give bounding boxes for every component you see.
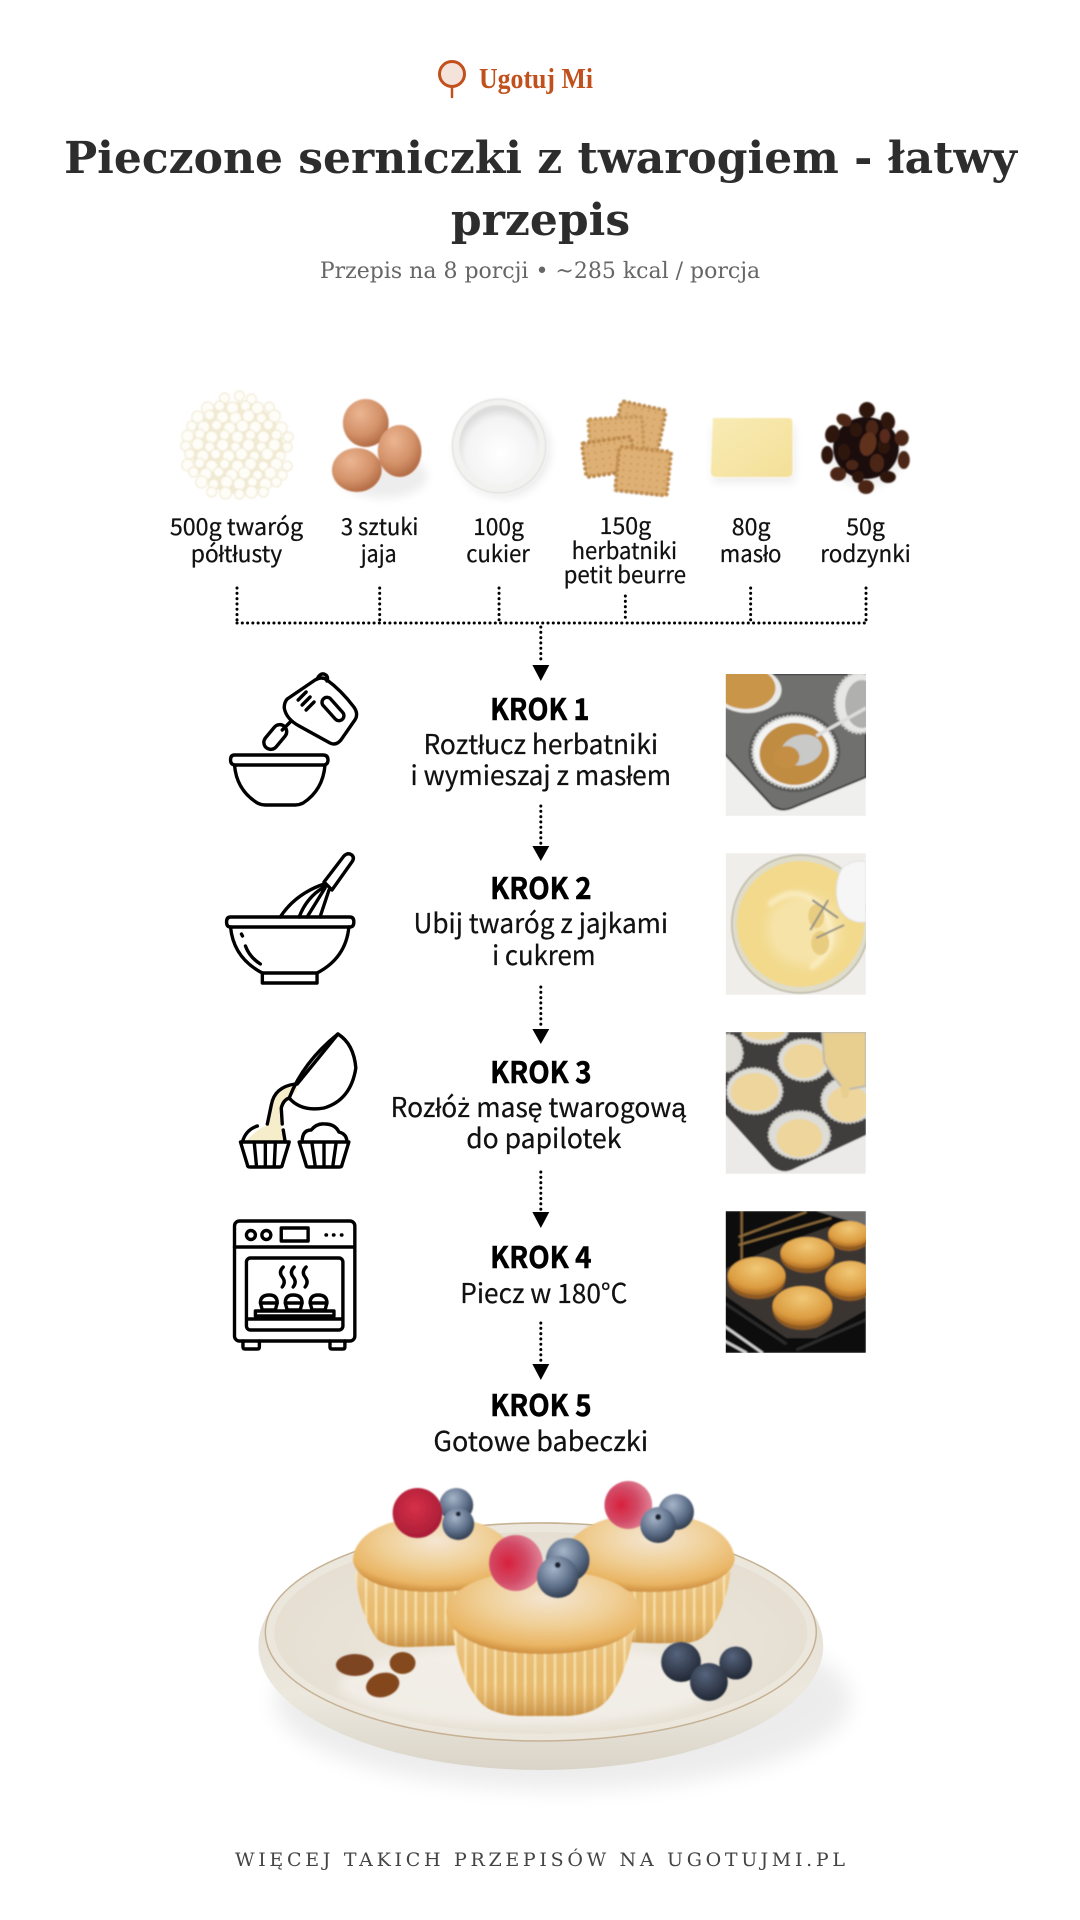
step 5 text bbox=[433, 1381, 648, 1459]
ingredient image: cottage cheese bbox=[181, 391, 293, 499]
ingredient label: eggs bbox=[341, 508, 418, 569]
ingredient label: eggs: 3 sztuki bbox=[341, 508, 418, 542]
panel: step 2 bbox=[227, 853, 869, 995]
panel: step 1 bbox=[231, 667, 883, 816]
ingredient label: biscuits: petit beurre bbox=[564, 556, 686, 590]
title: przepis bbox=[451, 195, 630, 246]
muffin: back left bbox=[353, 1517, 514, 1647]
ingredient label: biscuits: herbatniki bbox=[572, 532, 677, 566]
step 3 text: Rozłóż masę twarogową bbox=[391, 1086, 686, 1125]
ingredient label: raisins: rodzynki bbox=[820, 535, 911, 569]
arrow: to step 1 bbox=[532, 627, 549, 681]
ingredient image: biscuits bbox=[582, 401, 671, 497]
panel: step 3 bbox=[240, 1022, 875, 1174]
ingredient image: raisins bbox=[821, 402, 910, 494]
muffin: front bbox=[446, 1570, 641, 1716]
berries on muffins bbox=[393, 1481, 694, 1598]
step 2 text: i cukrem bbox=[492, 934, 596, 973]
ingredient label: sugar bbox=[466, 508, 530, 569]
step 3 text: do papilotek bbox=[466, 1117, 622, 1156]
icon: whisk and bowl bbox=[227, 854, 354, 983]
panel: step 5 bbox=[258, 1381, 851, 1790]
arrow: to step 3 bbox=[532, 987, 549, 1044]
subtitle: Przepis na 8 porcji • ~285 kcal / porcja bbox=[320, 259, 760, 284]
panel: ingredients bbox=[170, 391, 911, 623]
step 4 text: Piecz w 180°C bbox=[460, 1272, 627, 1311]
step 1 text: i wymieszaj z masłem bbox=[411, 754, 671, 793]
plate bbox=[258, 1522, 851, 1790]
logo wordmark: Ugotuj Mi bbox=[479, 64, 593, 95]
step 1 text: KROK 1 bbox=[490, 685, 590, 729]
arrow: to step 2 bbox=[532, 806, 549, 861]
ingredient label: eggs: jaja bbox=[359, 535, 397, 569]
step 2 text: KROK 2 bbox=[490, 864, 592, 908]
arrow: to step 4 bbox=[532, 1172, 549, 1228]
muffin: back right bbox=[564, 1513, 735, 1643]
raisins on plate bbox=[336, 1652, 416, 1701]
ingredient label: biscuits bbox=[564, 507, 686, 590]
photo: whipped batter in bowl bbox=[723, 853, 869, 995]
step 1 text: Roztłucz herbatniki bbox=[423, 723, 658, 762]
photo: crushed biscuits in muffin tin bbox=[726, 674, 866, 816]
ingredient label: butter: 80g bbox=[732, 508, 771, 542]
ingredient label: curd: 500g twaróg bbox=[170, 508, 303, 542]
ingredient label: butter bbox=[720, 508, 781, 569]
ingredient label: biscuits: 150g bbox=[599, 507, 651, 541]
step 3 text: KROK 3 bbox=[490, 1048, 592, 1092]
ingredient label: raisins: 50g bbox=[846, 508, 885, 542]
footer: WIĘCEJ TAKICH PRZEPISÓW NA UGOTUJMI.PL bbox=[235, 1848, 845, 1871]
ingredient label: sugar: 100g bbox=[473, 508, 524, 542]
step 4 text: KROK 4 bbox=[490, 1233, 592, 1277]
step 4 text bbox=[460, 1233, 627, 1311]
ingredient label: raisins bbox=[820, 508, 911, 569]
ingredient image: butter bbox=[711, 418, 794, 482]
icon: hand mixer and bowl bbox=[231, 674, 357, 805]
icon: pouring batter into cupcakes bbox=[240, 1034, 356, 1167]
recipe flow bbox=[170, 391, 911, 1790]
ingredient image: eggs bbox=[332, 399, 427, 498]
step 1 text bbox=[411, 685, 671, 793]
icon: logo spoon bbox=[440, 62, 464, 97]
photo: batter in muffin tin bbox=[726, 1032, 866, 1174]
connector: dotted bracket bbox=[237, 588, 866, 623]
title: Pieczone serniczki z twarogiem - łatwy bbox=[64, 133, 1018, 184]
blueberries on plate bbox=[661, 1642, 752, 1701]
step 5 text: KROK 5 bbox=[490, 1381, 592, 1425]
icon: oven bbox=[235, 1221, 355, 1349]
arrow: to step 5 bbox=[532, 1323, 549, 1380]
ingredient label: curd bbox=[170, 508, 303, 569]
step 5 text: Gotowe babeczki bbox=[433, 1420, 648, 1459]
ingredient label: sugar: cukier bbox=[466, 535, 530, 569]
panel: step 4 bbox=[235, 1211, 875, 1353]
step 2 text bbox=[414, 864, 668, 973]
photo: finished muffins on plate bbox=[258, 1481, 851, 1790]
ingredient label: curd: półtłusty bbox=[191, 535, 282, 569]
ingredient label: butter: masło bbox=[720, 535, 781, 569]
step 3 text bbox=[391, 1048, 686, 1156]
logo bbox=[440, 62, 593, 97]
ingredient image: sugar bowl bbox=[452, 399, 550, 497]
step 2 text: Ubij twaróg z jajkami bbox=[414, 902, 668, 941]
photo: muffins in oven bbox=[723, 1211, 875, 1353]
